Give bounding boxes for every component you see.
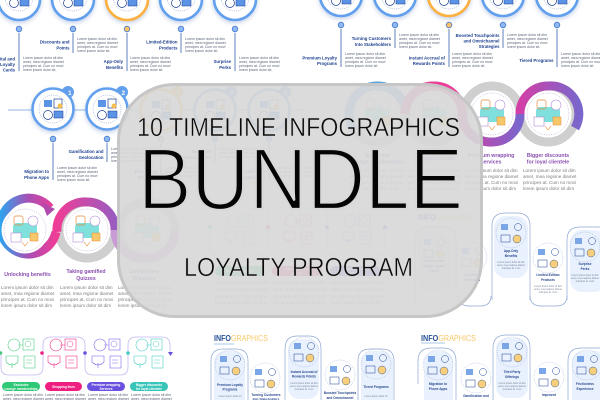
card headings: Third Party [504, 370, 521, 374]
lorem text: lorem ipsum dolor sit dim [408, 186, 459, 191]
card lorem [219, 382, 388, 398]
lorem text: lorem ipsum dolor sit dim [465, 186, 516, 191]
card lorem: Lorem ipsum dolor sit [219, 395, 242, 398]
card headings [217, 370, 389, 400]
lorem text: principes at. Cum no movi [1, 297, 54, 302]
headings: Personalization [179, 155, 211, 160]
panel: right serpentine timeline [349, 86, 579, 191]
timeline dots [16, 26, 238, 32]
card lorem: principes at. Cum [539, 291, 557, 294]
lorem text: Lorem ipsum dolor sit dim [23, 56, 63, 60]
card icons [215, 337, 391, 393]
lorem text: principes at. Cum no movi [273, 174, 314, 178]
lorem text: amet, mea regione diamet [331, 287, 385, 292]
headings: Limited time [129, 269, 159, 275]
bracket outline [1, 337, 170, 375]
card headings: Programs [223, 388, 238, 392]
headings: Shopping lines [417, 156, 455, 162]
number labels: 1 [68, 90, 72, 97]
card headings: Cards [429, 269, 439, 273]
lorem text: amet, mea regione diamet [239, 60, 280, 64]
title overlay panel [118, 84, 482, 316]
flow dots [0, 351, 173, 356]
lorem text: lorem ipsum dolor sit. [77, 49, 110, 53]
lorem text: amet, mea regione diamet [130, 60, 171, 64]
card outlines [415, 213, 600, 306]
bracket outline [210, 203, 385, 255]
headings: Programs [317, 61, 338, 66]
lorem text: lorem ipsum dolor sit dim [215, 300, 266, 305]
panel: centre flow timeline [208, 203, 388, 305]
lorem text: principes at. Cum no movi [507, 41, 548, 45]
card lorem: Lorem ipsum dolor sit dim [290, 382, 318, 385]
lorem text: amet, mea regione diamet [1, 291, 55, 296]
card headings: Improved [542, 393, 556, 397]
card headings: Perks [581, 267, 590, 271]
card lorem: amet, mea regione diamet [290, 385, 318, 388]
ribbon arrowhead [42, 203, 55, 216]
headings: Third Party [134, 169, 158, 174]
card headings: Limited-Edition [536, 273, 560, 277]
panel: bottom-centre card timeline [211, 334, 394, 400]
headings: Exclusive [366, 153, 390, 159]
headings: Cards [3, 68, 16, 72]
card headings: Frictionless [576, 382, 594, 386]
card headings: Instant Accrual of [291, 370, 318, 374]
lorem text: principes at. Cum no movi [130, 64, 171, 68]
panel: left serpentine timeline [1, 198, 175, 308]
headings: Missions [133, 276, 155, 282]
circle icons [5, 0, 249, 11]
lorem text [57, 147, 314, 182]
lorem text: lorem ipsum dolor sit. [57, 178, 90, 182]
lorem text: lorem ipsum dolor sit dim [350, 186, 401, 191]
lorem text: lorem ipsum dolor sit dim [60, 303, 111, 308]
card lorem: principes at. Cum [502, 267, 520, 270]
lorem text: Lorem ipsum dolor sit dim [219, 147, 259, 151]
title: 10 timeline infographics: 10 TIMELINE INFOGRAPHICS [137, 114, 460, 142]
lorem text: lorem ipsum dolor sit. [345, 64, 378, 68]
lorem text: Lorem ipsum dolor sit dim [507, 33, 547, 37]
timeline dots [50, 136, 272, 142]
card headings: Tiered Programs [363, 385, 389, 389]
lorem text: amet, mea regione diamet [465, 174, 519, 179]
lorem text: amet, mea regione diamet [215, 287, 269, 292]
grey rings [349, 86, 576, 142]
lorem text: principes at. Cum no movi [350, 180, 403, 185]
lorem text: lorem ipsum dolor sit dim [523, 186, 574, 191]
line icons [225, 215, 371, 244]
lorem text: amet, mea regione diamet [452, 56, 493, 60]
headings: Tiered Programs [519, 58, 554, 63]
panel: bottom-right card timeline [418, 334, 600, 400]
lorem text: Lorem ipsum dolor sit dim [45, 393, 85, 397]
card lorem: amet, mea regione diamet [534, 288, 562, 291]
headings: Improved [192, 149, 211, 154]
headings: Offerings [138, 175, 158, 180]
card headings: Offerings [505, 375, 519, 379]
lorem text: amet, mea regione diamet [23, 60, 64, 64]
lorem text: lorem ipsum dolor sit dim [1, 303, 52, 308]
card headings: App-Only [504, 249, 518, 253]
card fills [418, 216, 600, 292]
lorem text: Lorem ipsum dolor sit dim [408, 168, 461, 173]
lorem text: amet, mea regione diamet [77, 41, 118, 45]
card headings: Experience [576, 387, 594, 391]
lorem text: Lorem ipsum dolor sit dim [88, 393, 128, 397]
lorem text: amet, mea regione diamet [273, 170, 314, 174]
card fills [214, 339, 393, 400]
card lorem [498, 382, 526, 391]
number labels: 2 [122, 90, 126, 97]
card headings [423, 249, 592, 282]
card lorem: Lorem ipsum dolor sit dim [571, 274, 599, 277]
icon circles row [0, 0, 256, 20]
lorem text: amet, mea regione diamet [219, 151, 260, 155]
pill labels: Premium wrapping [92, 383, 120, 387]
pill labels: Shopping lines [52, 385, 75, 389]
pill labels: Services [99, 387, 113, 391]
pill labels: for loyal clientele [136, 387, 162, 391]
lorem text: lorem ipsum dolor sit. [239, 68, 272, 72]
number labels: 4 [230, 90, 234, 97]
headings: Unlocking benefits [4, 272, 51, 278]
pill labels [2, 382, 168, 391]
lorem text: principes at. Cum no movi [111, 155, 152, 159]
headings [24, 149, 266, 180]
lorem text: amet, mea regione diamet [185, 41, 226, 45]
lorem text: Lorem ipsum dolor sit dim [523, 168, 576, 173]
heading underline [214, 343, 234, 345]
lorem text: amet, mea regione diamet [273, 287, 327, 292]
lorem text: lorem ipsum dolor sit dim [331, 300, 382, 305]
lorem text: amet, mea regione diamet [523, 174, 577, 179]
pill labels: Missions [348, 272, 362, 276]
number labels: 3 [176, 90, 180, 97]
lorem text: amet, mea regione diamet [118, 291, 172, 296]
headings: Geolocation [79, 155, 104, 160]
headings: Benefits [106, 65, 124, 70]
headings: Into Stakeholders [355, 42, 392, 47]
card lorem: principes at. Cum [503, 388, 521, 391]
lorem text: amet, mea regione diamet [57, 170, 98, 174]
circle icons [2, 206, 170, 254]
headings: Premium Loyalty [302, 56, 338, 60]
lorem text: amet, mea regione diamet [507, 37, 548, 41]
pill labels: Exclusive [14, 383, 29, 387]
card lorem: principes at. Cum [295, 388, 313, 391]
lorem text: lorem ipsum dolor sit. [399, 45, 432, 49]
headings: Products [159, 46, 178, 50]
card headings: Physical and [424, 259, 444, 263]
headings: lounge memberships [352, 160, 404, 166]
line icons [6, 339, 163, 368]
lorem text: Lorem ipsum dolor sit dim [165, 166, 205, 170]
headings: ital and [0, 56, 15, 62]
lorem text: lorem ipsum dolor sit. [185, 49, 218, 53]
lorem text: principes at. Cum no movi [60, 297, 113, 302]
lorem text: amet, mea regione diamet [399, 37, 440, 41]
circle icons [39, 95, 283, 124]
headings: Turning Customers [352, 36, 392, 41]
card lorem [497, 261, 599, 294]
headings: Bigger discounts [527, 153, 569, 159]
card outlines [418, 335, 600, 400]
lorem text: principes at. Cum no movi [77, 45, 118, 49]
lorem text [350, 168, 577, 191]
panel: top-right blue timeline [302, 0, 600, 68]
card headings [429, 370, 594, 398]
lorem text: lorem ipsum dolor sit. [452, 64, 485, 68]
horizontal line [8, 109, 305, 111]
circle icons [327, 0, 571, 9]
headings: Discounts and [40, 40, 70, 44]
card lorem: amet, mea regione diamet [498, 385, 526, 388]
lorem text: lorem ipsum dolor sit dim [118, 303, 169, 308]
lorem text: Lorem ipsum dolor sit dim [60, 285, 113, 290]
INFOGRAPHICS heading: INFOGRAPHICS [214, 334, 268, 343]
lorem text: Lorem ipsum dolor sit dim [273, 280, 326, 285]
headings: App-Only [104, 59, 124, 64]
card headings: Migration to [429, 382, 447, 386]
card headings: Digital Loyalty [423, 264, 445, 268]
lorem text: Lorem ipsum dolor sit dim [1, 285, 54, 290]
headings: Rewards Points [413, 61, 446, 66]
number labels: 5 [284, 90, 288, 97]
headings: for loyal clientele [527, 160, 569, 166]
lorem text: amet, mea regione diamet [350, 174, 404, 179]
gradient serpentine ribbon [349, 86, 579, 142]
lorem text: Lorem ipsum dolor sit dim [452, 52, 492, 56]
timeline dots [338, 22, 560, 28]
grey rings [59, 202, 175, 258]
headings: and Omnichannel [463, 38, 500, 44]
card lorem: Lorem ipsum dolor sit dim [497, 261, 525, 264]
panel: bottom-left flow timeline [0, 337, 173, 400]
lorem text [3, 393, 172, 400]
card headings: Benefits [505, 254, 518, 258]
lorem text: amet, mea regione diamet [111, 151, 152, 155]
subtitle: loyalty program: LOYALTY PROGRAM [184, 252, 413, 282]
lorem text: principes at. Cum no movi [165, 174, 206, 178]
headings: Limited-Edition [146, 40, 178, 44]
card icons [423, 337, 600, 393]
card lorem: Lorem ipsum dolor sit dim [498, 382, 526, 385]
headings: Loyalty [0, 62, 16, 67]
icon circles row [320, 0, 578, 16]
pill labels: Lounge memberships [4, 387, 38, 391]
headings: Instant Accrual of [409, 56, 446, 60]
lorem text: principes at. Cum no movi [118, 297, 171, 302]
lorem text: Lorem ipsum dolor sit dim [350, 168, 403, 173]
number labels [68, 90, 288, 97]
card headings: Surprise [579, 262, 592, 266]
lorem text: Lorem ipsum dolor sit dim [331, 280, 384, 285]
lorem text: Lorem ipsum dolor sit dim [57, 166, 97, 170]
lorem text [23, 37, 280, 72]
pill labels: Bigger discounts [136, 383, 162, 387]
lorem text: Lorem ipsum dolor sit dim [345, 52, 385, 56]
panel: top-left blue timeline [0, 0, 281, 72]
lorem text: principes at. Cum no movi [273, 294, 326, 299]
lorem text: Lorem ipsum dolor sit dim [131, 393, 171, 397]
lorem text: amet, mea regione diamet [345, 56, 386, 60]
lorem text: amet, mea regione diamet [408, 174, 462, 179]
lorem text: principes at. Cum no movi [331, 294, 384, 299]
lorem text: principes at. Cum no movi [452, 60, 493, 64]
connector lines [19, 0, 281, 71]
card headings: Gamification and [463, 394, 489, 398]
lorem text: lorem ipsum dolor sit. [130, 68, 163, 72]
lorem text: lorem ipsum dolor sit. [111, 159, 144, 163]
card outlines [211, 336, 394, 400]
headings [4, 269, 159, 282]
lorem text: principes at. Cum no movi [399, 41, 440, 45]
headings [352, 153, 569, 166]
card headings: Phone Apps [429, 387, 447, 391]
headings: Gamification and [69, 149, 104, 154]
heading underline [421, 342, 445, 344]
headings [302, 33, 554, 66]
lorem text: lorem ipsum dolor sit. [23, 68, 56, 72]
pill labels [215, 266, 380, 276]
card headings: Premium Loyalty [217, 383, 243, 387]
lorem text: Lorem ipsum dolor sit dim [561, 52, 600, 56]
connector lines [53, 143, 269, 180]
headings: Surprise [214, 59, 232, 64]
connector lines [341, 29, 557, 67]
lorem text: principes at. Cum no movi [239, 64, 280, 68]
lorem text: Lorem ipsum dolor sit dim [185, 37, 225, 41]
lorem text: Lorem ipsum dolor sit dim [273, 166, 313, 170]
lorem text: Lorem ipsum dolor sit dim [77, 37, 117, 41]
lorem text: principes at. Cum no movi [523, 180, 576, 185]
lorem text: Lorem ipsum dolor sit dim [399, 33, 439, 37]
pill labels: Unlocking benefits [226, 269, 254, 273]
icon circles [32, 88, 290, 130]
lorem text: Lorem ipsum dolor sit dim [118, 285, 171, 290]
card fills [424, 338, 600, 400]
headings [0, 40, 232, 72]
circle icons [354, 90, 572, 138]
lorem text: principes at. Cum no movi [465, 180, 518, 185]
lorem text: Lorem ipsum dolor sit dim [3, 393, 43, 397]
headings: Points [56, 46, 70, 50]
headings: Premium wrapping [468, 153, 514, 159]
lorem text: lorem ipsum dolor sit dim [273, 300, 324, 305]
lorem text: principes at. Cum no movi [23, 64, 64, 68]
lorem text: Lorem ipsum dolor sit dim [215, 280, 268, 285]
lorem text: Lorem ipsum dolor sit dim [239, 56, 279, 60]
number badges [62, 86, 291, 98]
panel: middle-left numbered timeline [8, 86, 314, 182]
lorem text: Lorem ipsum dolor sit dim [465, 168, 518, 173]
INFOGRAPHICS heading: INFOGRAPHICS [418, 213, 475, 222]
headings: Experience [242, 175, 266, 180]
headings: Frictionless [241, 169, 266, 174]
lorem text: lorem ipsum dolor sit. [561, 64, 594, 68]
card headings: Boosted Touchpoints [324, 391, 356, 395]
card headings: Rewards Points [292, 374, 316, 378]
card lorem: Lorem ipsum dolor sit dim [534, 285, 562, 288]
card lorem: principes at. Cum [576, 280, 594, 283]
lorem text: principes at. Cum no movi [345, 60, 386, 64]
card headings: Turning Customers [251, 393, 281, 397]
headings: Phone Apps [24, 175, 50, 180]
lorem text: principes at. Cum no movi [215, 294, 268, 299]
lorem text [1, 285, 172, 308]
lorem text [345, 33, 600, 68]
headings: Migration to [24, 169, 49, 174]
card icons [419, 218, 600, 273]
card headings: and Points [464, 278, 480, 282]
lorem text: principes at. Cum no movi [408, 180, 461, 185]
pill labels: Taking gamified [285, 267, 309, 271]
card headings: Products [541, 278, 555, 282]
headings: Boosted Touchpoints [456, 33, 500, 38]
lorem text [215, 280, 385, 305]
gradient serpentine ribbon [1, 198, 175, 258]
lorem text: amet, mea regione diamet [165, 170, 206, 174]
lorem text: Lorem ipsum dolor sit dim [130, 56, 170, 60]
panel: right-middle card timeline [415, 213, 600, 306]
headings: Perks [219, 65, 232, 70]
lorem text: principes at. Cum no movi [57, 174, 98, 178]
lorem text: principes at. Cum no movi [185, 45, 226, 49]
lorem text: lorem ipsum dolor sit. [507, 45, 540, 49]
pill labels: Limited time [346, 267, 365, 271]
card headings: and Omnichannel [327, 396, 353, 400]
flow dots [208, 224, 388, 229]
card lorem: amet, mea regione diamet [571, 277, 599, 280]
lorem text: Lorem ipsum dolor sit dim [111, 147, 151, 151]
headings: services [481, 160, 501, 166]
headings: Quizzes [76, 276, 96, 282]
INFOGRAPHICS heading: INFOGRAPHICS [421, 334, 476, 343]
card lorem: Lorem ipsum dolor sit [365, 395, 388, 398]
card headings: Discounts [464, 273, 480, 277]
headings: Strategies [479, 44, 500, 49]
lorem text: amet, mea regione diamet [60, 291, 114, 296]
headings: Taking gamified [66, 269, 106, 275]
pill labels: Quizzes [291, 272, 303, 276]
lorem text: principes at. Cum no movi [219, 155, 260, 159]
title: bundle: BUNDLE [138, 131, 463, 228]
card lorem: amet, mea regione diamet [497, 264, 525, 267]
